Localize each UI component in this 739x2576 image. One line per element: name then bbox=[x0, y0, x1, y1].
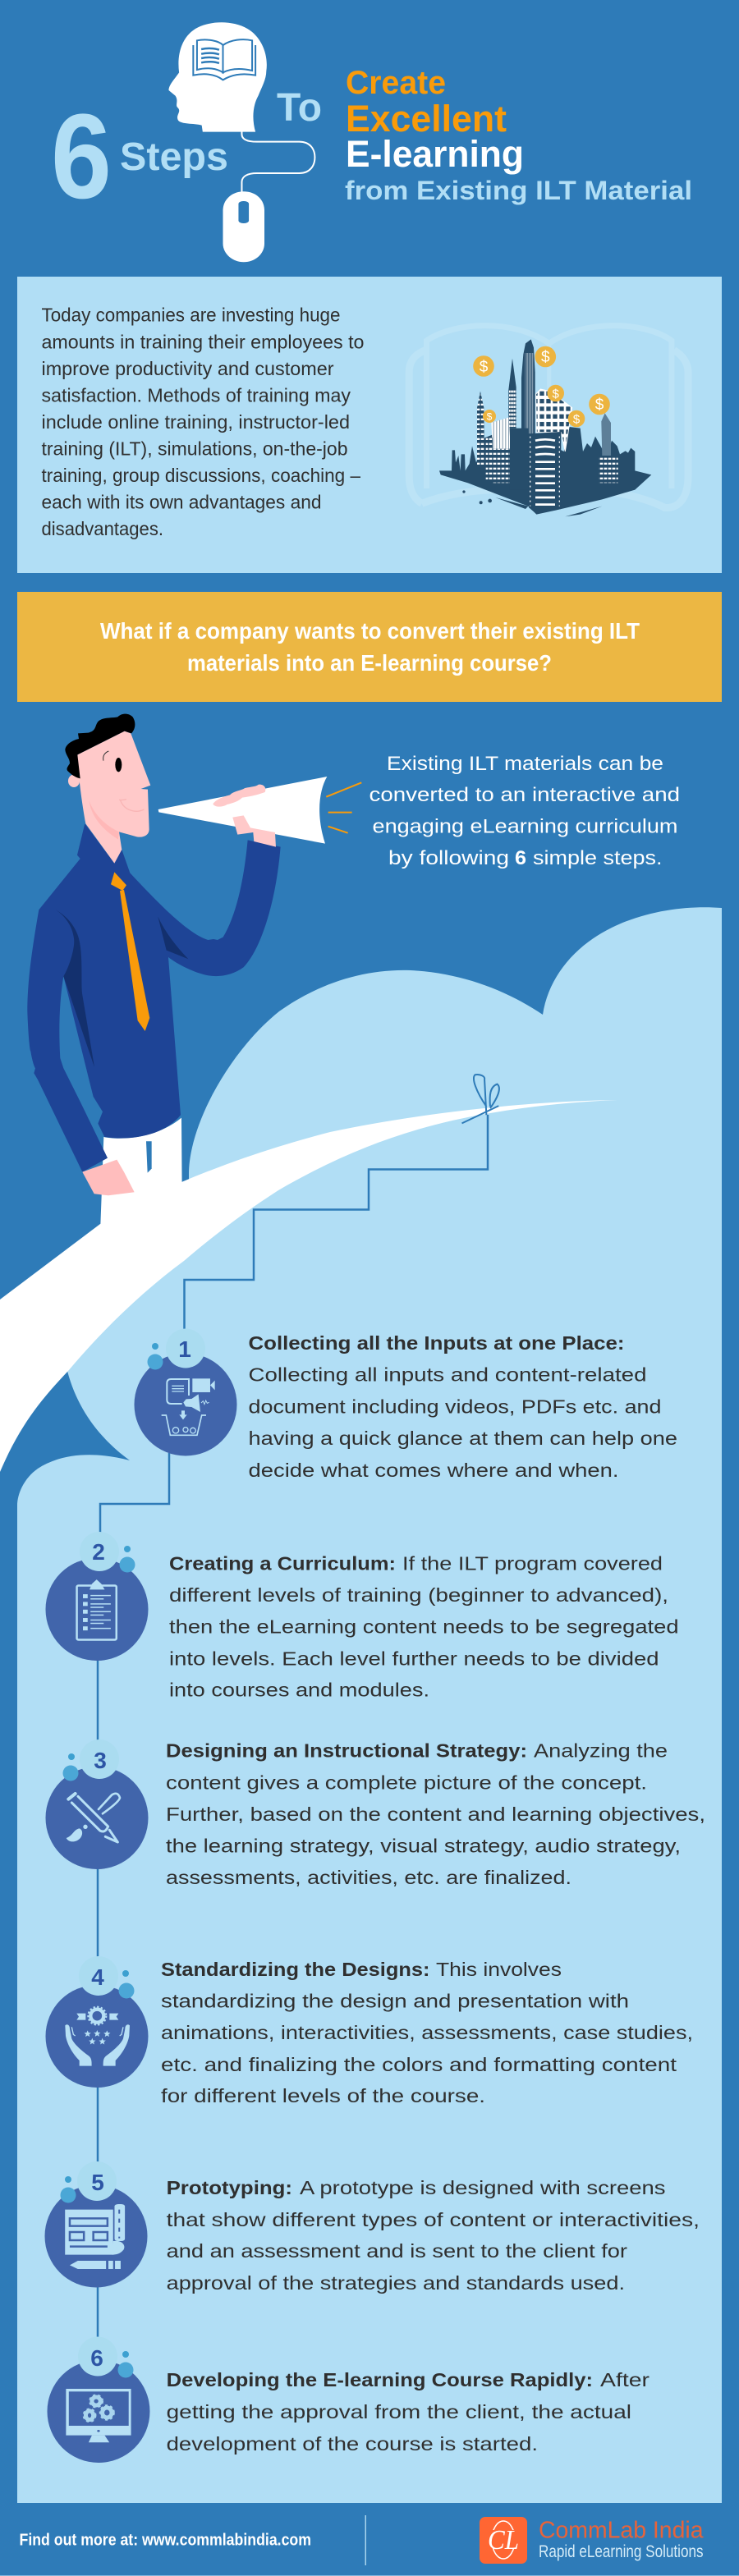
step 4 text: for different levels of the course. bbox=[161, 2085, 485, 2106]
intro text block: each with its own advantages and bbox=[41, 492, 322, 513]
icon: clipboard bbox=[77, 1579, 117, 1640]
step 6 text: After bbox=[600, 2369, 649, 2390]
step 5 text: that show different types of content or interactivities, bbox=[167, 2209, 700, 2230]
step 6: 6 bbox=[90, 2345, 103, 2371]
icon: faint book behind city bbox=[409, 326, 688, 507]
title: E-learning bbox=[346, 133, 524, 175]
step 3 text: Further, based on the content and learning objectives, bbox=[166, 1804, 705, 1825]
icon: dollar coins bbox=[473, 346, 610, 427]
icon: hands with gear and stars bbox=[65, 2007, 130, 2066]
step 3 text: the learning strategy, visual strategy, audio strategy, bbox=[166, 1835, 681, 1856]
step 3 text bbox=[166, 1740, 705, 1888]
shirt shading bbox=[55, 910, 188, 1067]
step 2 bbox=[46, 1532, 679, 1701]
icon: collecting inputs bbox=[162, 1378, 215, 1435]
icon: dollar coins: $ bbox=[553, 387, 560, 401]
panel: question banner bbox=[17, 592, 722, 702]
intro text block bbox=[41, 305, 365, 539]
icon: dollar coins: $ bbox=[573, 412, 581, 427]
intro text block: improve productivity and customer bbox=[41, 358, 334, 379]
step 3 text: Analyzing the bbox=[534, 1740, 668, 1762]
panel: question banner: What if a company wants to convert their existing ILT bbox=[100, 618, 640, 644]
step 1 text: document including videos, PDFs etc. and bbox=[248, 1396, 662, 1417]
step 6 bbox=[48, 2336, 649, 2463]
step 2 text: then the eLearning content needs to be segregated bbox=[169, 1616, 679, 1638]
icon: dollar coins: $ bbox=[487, 410, 493, 422]
step 4 text: standardizing the design and presentation with bbox=[161, 1990, 629, 2011]
text block: megaphone message: by following bbox=[388, 847, 509, 869]
intro text block: Today companies are investing huge bbox=[41, 305, 340, 326]
logo: CommLab India: Rapid eLearning Solutions bbox=[539, 2542, 703, 2561]
icon: dollar coins: $ bbox=[595, 396, 604, 414]
intro text block: training, group discussions, coaching – bbox=[41, 465, 360, 486]
text block: megaphone message: Existing ILT materials can be bbox=[387, 753, 663, 775]
icon: prototype sheet and pencil bbox=[65, 2204, 125, 2269]
step 1 text: Collecting all the Inputs at one Place: bbox=[248, 1332, 624, 1354]
intro text block: include online training, instructor-led bbox=[41, 411, 350, 433]
step 6 text bbox=[167, 2369, 649, 2455]
step 4 text: Standardizing the Designs: bbox=[161, 1959, 430, 1980]
step 2 text bbox=[169, 1552, 679, 1701]
step 5 text bbox=[167, 2177, 700, 2294]
step 5 text: A prototype is designed with screens bbox=[300, 2177, 665, 2198]
megaphone sound lines bbox=[326, 782, 361, 833]
step 2 text: different levels of training (beginner to advanced), bbox=[169, 1584, 668, 1606]
step 4 bbox=[46, 1956, 693, 2106]
icon: city skyline bbox=[439, 339, 651, 516]
panel: question banner: materials into an E-learning course? bbox=[187, 650, 552, 676]
step 1 text: Collecting all inputs and content-related bbox=[248, 1364, 647, 1386]
step 5 bbox=[44, 2161, 700, 2294]
header illustration: head and mouse bbox=[168, 22, 314, 262]
man head bbox=[65, 714, 150, 864]
title: To bbox=[277, 86, 322, 130]
icon: monitor with gears bbox=[66, 2389, 131, 2442]
text block: megaphone message: converted to an interactive and bbox=[370, 784, 680, 806]
step 1 text: having a quick glance at them can help one bbox=[248, 1428, 677, 1449]
step 1 bbox=[135, 1328, 677, 1481]
stair connector line bbox=[98, 1115, 488, 2340]
footer bbox=[0, 2515, 739, 2576]
step 4 text: animations, interactivities, assessments, case studies, bbox=[161, 2022, 693, 2043]
step 2 text: into courses and modules. bbox=[169, 1680, 429, 1701]
icon: mouse cord bbox=[241, 131, 314, 192]
text block: megaphone message: 6 bbox=[515, 847, 526, 869]
step 3 text: assessments, activities, etc. are finalized. bbox=[166, 1867, 571, 1888]
step 3 text: content gives a complete picture of the concept. bbox=[166, 1772, 647, 1793]
title: Create bbox=[346, 65, 446, 101]
step 2 text: If the ILT program covered bbox=[402, 1552, 663, 1574]
title: Steps bbox=[120, 135, 228, 179]
icon: mouse body bbox=[223, 191, 264, 262]
step 3 bbox=[46, 1739, 705, 1888]
text block: megaphone message bbox=[370, 753, 680, 869]
logo: CommLab India: CL bbox=[488, 2525, 519, 2555]
title: Excellent bbox=[346, 98, 507, 140]
icon: megaphone bbox=[158, 777, 327, 844]
man hands bbox=[82, 785, 276, 1195]
step 2: 2 bbox=[92, 1539, 105, 1565]
panel: introduction bbox=[17, 277, 722, 573]
step 3 text: Designing an Instructional Strategy: bbox=[166, 1740, 527, 1762]
step 4: 4 bbox=[91, 1964, 104, 1990]
icon: pencil and brush bbox=[67, 1794, 120, 1842]
man trousers bbox=[100, 1118, 182, 1226]
step 5: 5 bbox=[91, 2170, 104, 2195]
step 5 text: Prototyping: bbox=[167, 2177, 292, 2198]
step 4 text bbox=[161, 1959, 693, 2106]
intro text block: training (ILT), simulations, on-the-job bbox=[41, 438, 347, 460]
step 1 text bbox=[248, 1332, 677, 1481]
white swoosh bbox=[0, 1100, 617, 1472]
ribbon on stairs bbox=[462, 1075, 499, 1123]
intro text block: satisfaction. Methods of training may bbox=[41, 384, 351, 406]
step 4 text: This involves bbox=[436, 1959, 562, 1980]
text block: megaphone message: simple steps. bbox=[533, 847, 662, 869]
step 6 text: Developing the E-learning Course Rapidly: bbox=[167, 2369, 593, 2390]
icon: open book bbox=[193, 39, 255, 80]
man shirt with arms bbox=[27, 823, 281, 1172]
step 5 text: and an assessment and is sent to the client for bbox=[167, 2240, 627, 2262]
logo: CommLab India bbox=[480, 2517, 704, 2564]
step 1: 1 bbox=[178, 1336, 191, 1362]
icon: dollar coins: $ bbox=[541, 349, 550, 366]
icon: head silhouette bbox=[168, 22, 267, 132]
step 6 text: getting the approval from the client, the actual bbox=[167, 2401, 631, 2422]
illustration: man with megaphone bbox=[27, 714, 361, 1226]
man tie bbox=[111, 872, 149, 1031]
footer link text: Find out more at: www.commlabindia.com bbox=[20, 2532, 311, 2550]
panel: steps background cloud bbox=[17, 907, 722, 2503]
step 3: 3 bbox=[94, 1748, 107, 1773]
title: from Existing ILT Material bbox=[345, 176, 692, 205]
step 5 text: approval of the strategies and standards used. bbox=[167, 2272, 625, 2294]
title: 6 bbox=[51, 89, 112, 224]
text block: megaphone message: engaging eLearning curriculum bbox=[373, 816, 678, 838]
intro text block: amounts in training their employees to bbox=[41, 331, 365, 352]
logo: CommLab India: CommLab India bbox=[539, 2518, 704, 2544]
step 6 text: development of the course is started. bbox=[167, 2433, 538, 2455]
step 2 text: Creating a Curriculum: bbox=[169, 1552, 396, 1574]
title bbox=[51, 65, 692, 224]
step 1 text: decide what comes where and when. bbox=[248, 1460, 619, 1481]
step 2 text: into levels. Each level further needs to be divided bbox=[169, 1648, 659, 1669]
intro text block: disadvantages. bbox=[41, 518, 163, 539]
icon: dollar coins: $ bbox=[480, 359, 489, 376]
step 4 text: etc. and finalizing the colors and formatting content bbox=[161, 2054, 677, 2075]
